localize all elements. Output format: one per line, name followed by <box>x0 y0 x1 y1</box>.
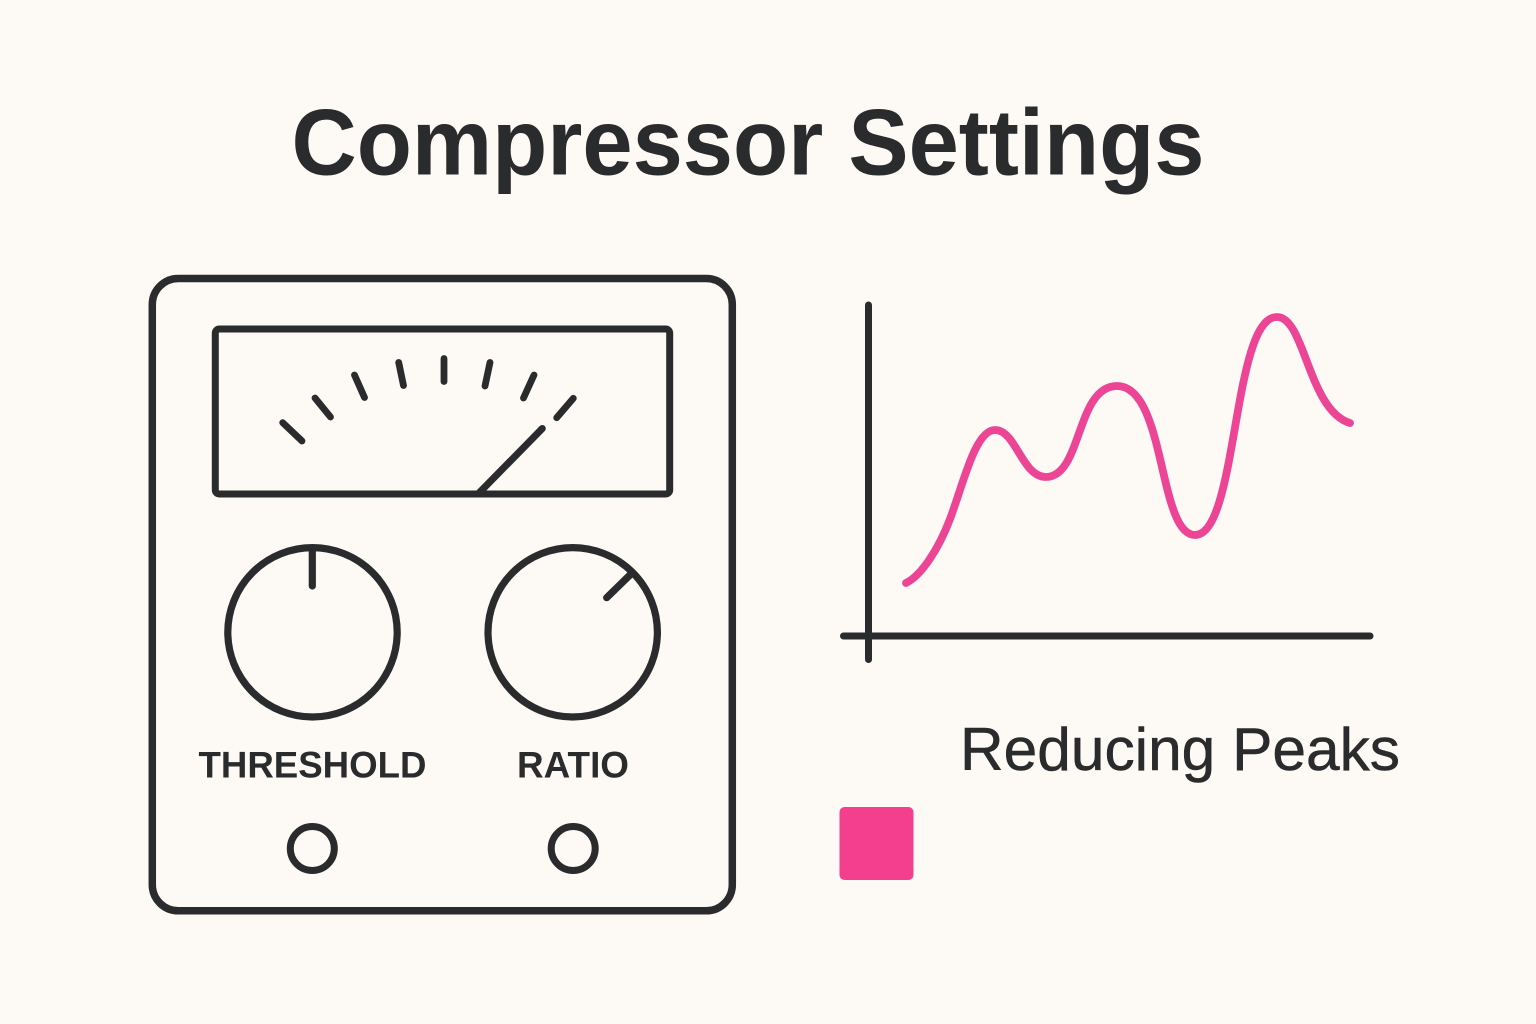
threshold knob <box>228 548 397 717</box>
ratio indicator <box>551 826 595 870</box>
waveform curve <box>906 317 1350 583</box>
meter ticks <box>283 358 573 441</box>
title: Compressor Settings <box>292 90 1204 194</box>
threshold indicator <box>290 826 334 870</box>
ratio label: RATIO <box>517 744 629 786</box>
y axis <box>865 305 872 660</box>
panel: compressor device <box>152 278 732 911</box>
VU meter <box>215 329 670 494</box>
x axis <box>844 632 1370 640</box>
device outline <box>152 278 732 911</box>
meter needle <box>479 428 542 493</box>
ratio knob <box>488 548 657 717</box>
legend label: Reducing Peaks <box>960 716 1400 783</box>
line chart <box>844 305 1370 660</box>
meter frame <box>215 329 670 494</box>
threshold label: THRESHOLD <box>198 744 426 786</box>
legend swatch <box>840 807 914 880</box>
